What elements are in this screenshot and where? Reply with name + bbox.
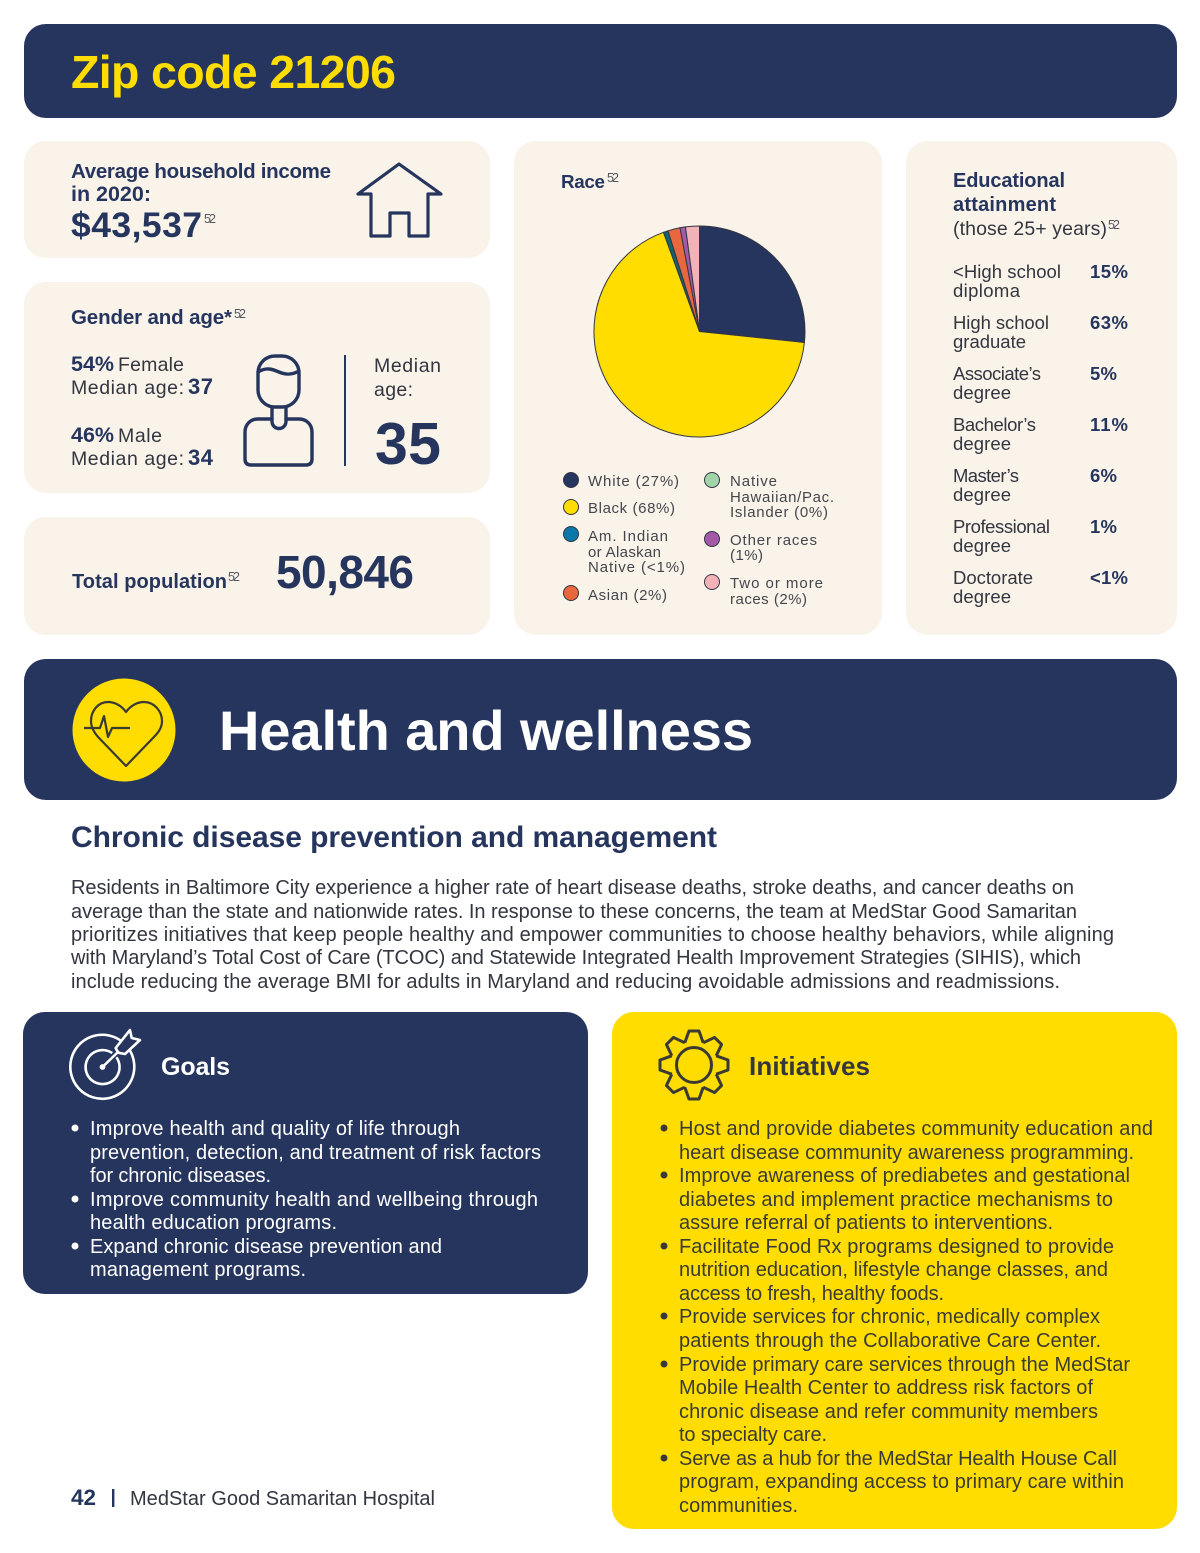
- icon: person: [245, 356, 312, 465]
- icon: heart with pulse: [72, 678, 176, 782]
- list: initiatives: assure referral of patients to interventions.: [679, 1212, 1053, 1234]
- text block: introduction: [70, 877, 1114, 993]
- panel: average household income: $43,537: [71, 205, 202, 245]
- panel: race: Race: [561, 171, 605, 192]
- panel: average household income: Average household income: [71, 160, 331, 183]
- panel: educational attainment: 5%: [1090, 363, 1117, 384]
- panel: educational attainment: Educational: [953, 170, 1065, 192]
- panel: total population: Total population: [72, 571, 227, 593]
- panel: goals: [23, 1012, 588, 1294]
- list: goals: prevention, detection, and treatment of risk factors: [90, 1142, 541, 1164]
- panel: educational attainment: Professional: [953, 516, 1050, 537]
- panel: gender and age: 54%: [71, 352, 114, 376]
- legend: race: Other races: [730, 532, 817, 549]
- panel: gender and age: [24, 282, 490, 493]
- panel: educational attainment: 11%: [1090, 414, 1128, 435]
- list: initiatives: Facilitate Food Rx programs designed to provide: [679, 1236, 1114, 1258]
- legend: race: Islander (0%): [730, 504, 828, 521]
- list: initiatives: chronic disease and refer community members: [679, 1401, 1098, 1423]
- list: goals: Improve health and quality of life through: [90, 1118, 460, 1140]
- footer: page number and hospital name: 42: [71, 1485, 96, 1510]
- title banner: Zip code 21206: [24, 24, 1177, 118]
- title banner: Zip code 21206: Zip code 21206: [71, 46, 396, 98]
- list: initiatives: Improve awareness of prediabetes and gestational: [679, 1165, 1130, 1187]
- text block: introduction: include reducing the average BMI for adults in Maryland and reducing avoidable admissions and readmissions.: [71, 971, 1060, 993]
- panel: educational attainment: 15%: [1090, 261, 1128, 282]
- panel: gender and age: 52: [234, 307, 246, 321]
- panel: goals: Goals: [161, 1053, 230, 1081]
- icon: gear: [660, 1031, 728, 1099]
- panel: educational attainment: degree: [953, 586, 1011, 607]
- panel: gender and age: Median age:: [71, 377, 184, 399]
- panel: initiatives: Initiatives: [749, 1051, 870, 1081]
- panel: gender and age: Female: [118, 354, 184, 376]
- legend: race: Black (68%): [588, 500, 675, 517]
- panel: average household income: in 2020:: [71, 182, 151, 206]
- panel: educational attainment: Bachelor’s: [953, 414, 1036, 435]
- panel: gender and age: 37: [188, 374, 213, 399]
- panel: educational attainment: Associate’s: [953, 363, 1041, 384]
- banner: health and wellness: Health and wellness: [219, 699, 753, 762]
- panel: total population: [24, 517, 490, 635]
- list: initiatives: communities.: [679, 1495, 798, 1517]
- list: initiatives: program, expanding access to primary care within: [679, 1471, 1124, 1493]
- list: initiatives: to specialty care.: [679, 1424, 827, 1446]
- list: initiatives: Host and provide diabetes community education and: [679, 1118, 1153, 1140]
- legend: race: Asian (2%): [588, 587, 667, 604]
- footer: page number and hospital name: MedStar Good Samaritan Hospital: [130, 1488, 435, 1510]
- list: goals: health education programs.: [90, 1212, 337, 1234]
- list: initiatives: heart disease community awareness programming.: [679, 1142, 1134, 1164]
- list: goals: [72, 1118, 541, 1281]
- panel: educational attainment: diploma: [953, 280, 1021, 301]
- panel: educational attainment: <High school: [953, 261, 1061, 282]
- panel: educational attainment: 63%: [1090, 312, 1128, 333]
- panel: gender and age: Median: [374, 355, 441, 377]
- icon: target with arrow: [70, 1030, 140, 1099]
- list: initiatives: patients through the Collaborative Care Center.: [679, 1330, 1101, 1352]
- panel: educational attainment: High school: [953, 312, 1049, 333]
- legend: race: or Alaskan: [588, 544, 661, 561]
- list: initiatives: Mobile Health Center to address risk factors of: [679, 1377, 1093, 1399]
- legend: race: Two or more: [730, 575, 823, 592]
- panel: gender and age: 34: [188, 445, 214, 470]
- legend: race: races (2%): [730, 591, 807, 608]
- list: initiatives: [660, 1118, 1153, 1517]
- heading: chronic disease prevention and management: Chronic disease prevention and management: [71, 821, 717, 854]
- list: initiatives: Serve as a hub for the MedStar Health House Call: [679, 1448, 1117, 1470]
- panel: gender and age: age:: [374, 379, 413, 401]
- list: initiatives: Provide services for chronic, medically complex: [679, 1306, 1100, 1328]
- panel: educational attainment: degree: [953, 433, 1011, 454]
- panel: total population: 52: [228, 570, 240, 584]
- panel: educational attainment: 6%: [1090, 465, 1117, 486]
- banner: health and wellness: [24, 659, 1177, 800]
- panel: educational attainment: Master’s: [953, 465, 1019, 486]
- panel: educational attainment: attainment: [953, 194, 1056, 216]
- list: initiatives: access to fresh, healthy foods.: [679, 1283, 944, 1305]
- text block: introduction: prioritizes initiatives that keep people healthy and empower communities to choose healthy behaviors, while aligning: [71, 924, 1114, 946]
- list: goals: Expand chronic disease prevention and: [90, 1236, 442, 1258]
- panel: gender and age: 46%: [71, 423, 114, 447]
- list: goals: Improve community health and wellbeing through: [90, 1189, 538, 1211]
- list: initiatives: Provide primary care services through the MedStar: [679, 1354, 1130, 1376]
- panel: educational attainment: <1%: [1090, 567, 1128, 588]
- pie chart: race: [594, 226, 805, 437]
- legend: race: Native (<1%): [588, 559, 685, 576]
- icon: house: [358, 164, 441, 236]
- panel: gender and age: Gender and age*: [71, 306, 232, 329]
- panel: average household income: 52: [204, 212, 216, 226]
- list: goals: management programs.: [90, 1259, 306, 1281]
- panel: race: 52: [607, 171, 619, 185]
- panel: educational attainment: degree: [953, 484, 1011, 505]
- panel: educational attainment: Doctorate: [953, 567, 1033, 588]
- panel: educational attainment: degree: [953, 535, 1011, 556]
- panel: educational attainment: [906, 141, 1177, 635]
- panel: educational attainment: degree: [953, 382, 1011, 403]
- legend: race: Native: [730, 473, 777, 490]
- legend: race: Am. Indian: [588, 528, 668, 545]
- panel: educational attainment: 1%: [1090, 516, 1117, 537]
- panel: educational attainment: 52: [1108, 218, 1120, 232]
- panel: educational attainment: graduate: [953, 331, 1026, 352]
- panel: total population: 50,846: [276, 546, 414, 598]
- panel: average household income: [24, 141, 490, 258]
- list: initiatives: nutrition education, lifestyle change classes, and: [679, 1259, 1108, 1281]
- panel: gender and age: Male: [118, 425, 162, 447]
- panel: gender and age: 35: [375, 411, 441, 477]
- list: initiatives: diabetes and implement practice mechanisms to: [679, 1189, 1113, 1211]
- panel: race: [514, 141, 882, 635]
- legend: race: (1%): [730, 547, 763, 564]
- panel: initiatives: [612, 1012, 1177, 1529]
- panel: gender and age: Median age:: [71, 448, 184, 470]
- text block: introduction: Residents in Baltimore City experience a higher rate of heart disease deaths, stroke deaths, and cancer deaths on: [71, 877, 1074, 899]
- text block: introduction: with Maryland’s Total Cost of Care (TCOC) and Statewide Integrated Health Improvement Strategies (SIHIS), which: [70, 947, 1081, 969]
- legend: race: Hawaiian/Pac.: [730, 489, 834, 506]
- panel: educational attainment: (those 25+ years): [953, 218, 1107, 240]
- legend: race: [564, 472, 834, 608]
- list: goals: for chronic diseases.: [90, 1165, 271, 1187]
- text block: introduction: average than the state and nationwide rates. In response to these concerns, the team at MedStar Good Samaritan: [71, 901, 1077, 923]
- legend: race: White (27%): [588, 473, 679, 490]
